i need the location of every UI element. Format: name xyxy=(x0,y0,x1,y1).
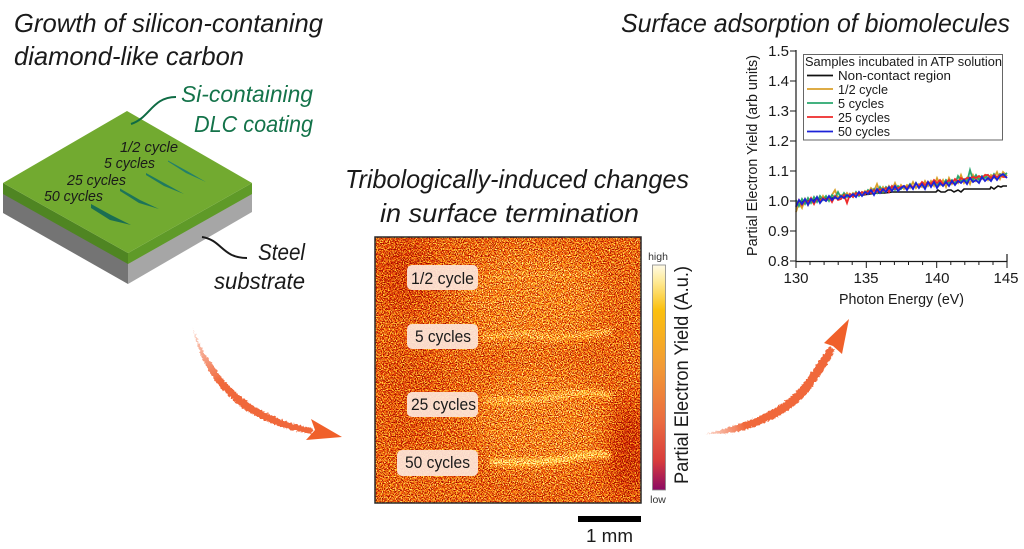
y-axis tick labels: 1.2 xyxy=(768,133,789,150)
x-axis title: Photon Energy (eV) xyxy=(839,291,964,308)
label: Si-containing DLC coating: DLC coating xyxy=(194,111,313,137)
label: steel substrate: substrate xyxy=(214,268,305,294)
label: Si-containing DLC coating xyxy=(181,81,313,137)
label: Si-containing DLC coating: Si-containing xyxy=(181,81,313,107)
data: 1/2 cycle xyxy=(796,172,1007,212)
label: 50 cycles: 50 cycles xyxy=(44,189,103,205)
title: tribologically-induced changes: Tribologically-induced changes xyxy=(345,164,689,194)
y-axis tick labels: 0.8 xyxy=(768,253,789,270)
label: steel substrate: Steel xyxy=(258,239,306,265)
title: growth of silicon-containing DLC: Growth of silicon-contaning xyxy=(14,8,324,38)
y-axis ticks xyxy=(790,51,796,261)
legend: 1/2 cycle xyxy=(838,83,888,97)
colour bar label: low: low xyxy=(650,494,666,506)
title: growth of silicon-containing DLC xyxy=(14,8,324,71)
title: surface adsorption of biomolecules: Surface adsorption of biomolecules xyxy=(621,8,1010,38)
panel: spectrum chart xyxy=(745,43,1019,308)
legend: 25 cycles xyxy=(838,111,890,125)
steel substrate right side xyxy=(128,193,252,284)
wear track: 5 cycles xyxy=(146,173,184,194)
label pill: 5 cycles: 5 cycles xyxy=(415,327,471,346)
label pill: 25 cycles xyxy=(407,392,478,417)
wear track: 1/2 cycle xyxy=(168,160,206,182)
x-axis tick labels: 140 xyxy=(924,270,950,287)
y-axis tick labels: 1.4 xyxy=(768,73,789,90)
legend: 5 cycles xyxy=(838,97,884,111)
colour bar label: high: high xyxy=(648,251,668,263)
steel substrate left side xyxy=(3,193,128,284)
label pill: 5 cycles xyxy=(407,324,478,349)
title: tribologically-induced changes: in surface termination xyxy=(380,198,639,228)
heat map image xyxy=(375,235,644,503)
x-axis tick labels: 130 xyxy=(783,270,809,287)
colour bar xyxy=(652,265,666,490)
wear track: 25 cycles xyxy=(120,188,159,209)
title: growth of silicon-containing DLC: diamond-like carbon xyxy=(14,41,244,71)
y-axis title: Partial Electron Yield (arb units) xyxy=(745,55,761,256)
arrow: map to spectrum xyxy=(705,319,849,434)
legend: Samples incubated in ATP solution xyxy=(805,55,1002,69)
coating top face xyxy=(3,111,252,253)
x-axis tick labels: 145 xyxy=(993,270,1019,287)
y-axis tick labels: 0.9 xyxy=(768,223,789,240)
colour bar title: Partial Electron Yield (A.u.) xyxy=(672,266,693,484)
x-axis ticks xyxy=(796,261,1007,268)
title: tribologically-induced changes xyxy=(345,164,689,228)
label: steel substrate xyxy=(214,239,306,294)
coating left edge xyxy=(3,183,128,264)
y-axis tick labels: 1.3 xyxy=(768,103,789,120)
scale bar label: 1 mm xyxy=(586,526,633,546)
legend: 50 cycles xyxy=(838,125,890,139)
label pill: 1/2 cycle: 1/2 cycle xyxy=(411,269,474,288)
map border xyxy=(375,237,641,503)
label: 25 cycles: 25 cycles xyxy=(66,173,126,189)
leader line: coating xyxy=(131,97,176,124)
wear track: 50 cycles xyxy=(91,204,131,225)
data: 25 cycles xyxy=(796,175,1007,206)
data: non-contact region xyxy=(796,186,1007,204)
panel: coated steel block diagram xyxy=(3,81,313,294)
axes frame xyxy=(796,50,1007,262)
leader line: steel xyxy=(202,237,247,258)
legend: Non-contact region xyxy=(838,69,951,83)
y-axis tick labels: 1.1 xyxy=(768,163,789,180)
label: 5 cycles: 5 cycles xyxy=(104,156,155,172)
label pill: 50 cycles: 50 cycles xyxy=(405,453,470,472)
coating right edge xyxy=(128,183,252,264)
arrow: block to map xyxy=(193,328,342,440)
label pill: 50 cycles xyxy=(397,450,478,476)
data: 5 cycles xyxy=(796,170,1007,206)
scale bar xyxy=(578,516,641,522)
y-axis tick labels: 1.0 xyxy=(768,193,789,210)
legend xyxy=(804,54,1002,140)
y-axis tick labels: 1.5 xyxy=(768,43,789,60)
x-axis tick labels xyxy=(783,270,1019,287)
label pill: 25 cycles: 25 cycles xyxy=(411,395,476,414)
data: 50 cycles xyxy=(796,174,1007,207)
y-axis tick labels xyxy=(768,43,789,270)
panel: partial electron yield map xyxy=(375,235,693,546)
x-axis tick labels: 135 xyxy=(853,270,879,287)
label: 1/2 cycle: 1/2 cycle xyxy=(120,140,178,156)
